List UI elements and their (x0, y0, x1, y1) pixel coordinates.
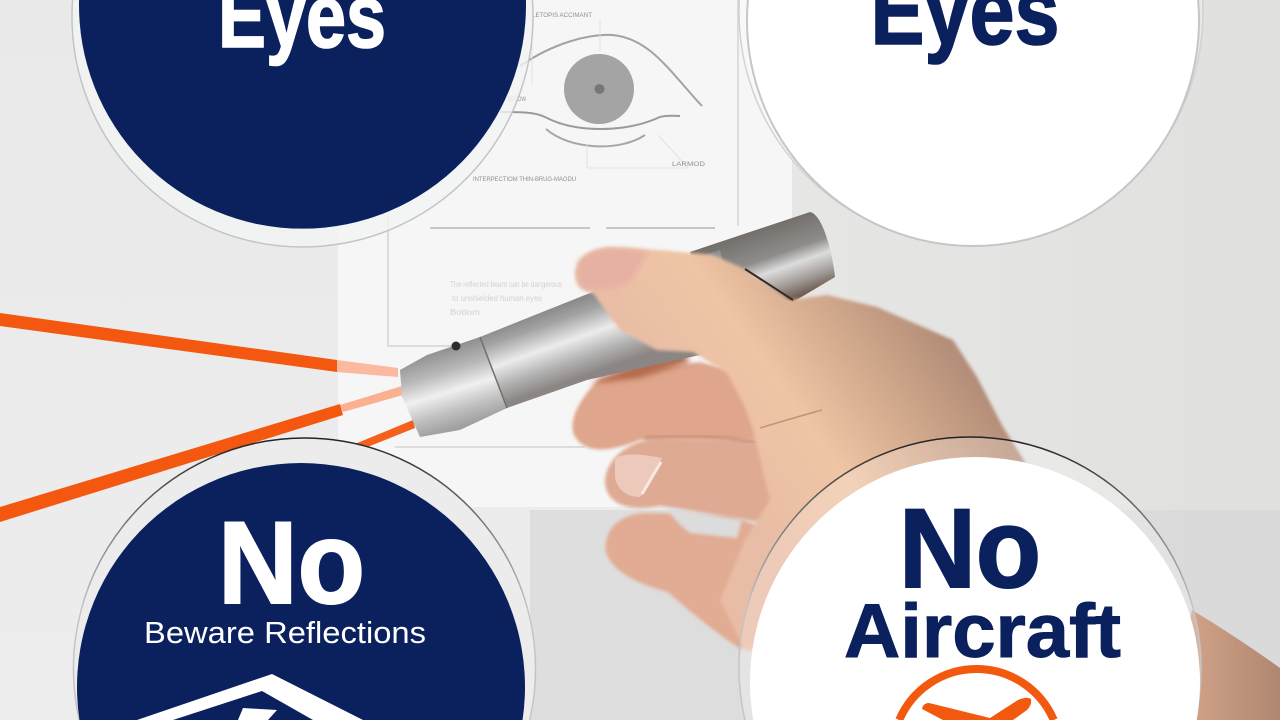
diagram labels: BECOW (508, 97, 526, 103)
callout: bottom right, no aircraft (739, 437, 1201, 720)
fingernail (615, 455, 662, 497)
gap between fingers (668, 508, 742, 538)
thumb and pointer crease (745, 269, 793, 300)
subheading: Aircraft (844, 589, 1121, 674)
laser beams (0, 313, 415, 522)
knuckle crease (760, 410, 822, 428)
finger shadow (645, 436, 755, 442)
paper notes: to unshielded human eyes (452, 294, 542, 303)
icon: aircraft prohibited (899, 669, 1054, 720)
forearm (1170, 610, 1280, 720)
thumb tip (578, 249, 648, 290)
callout: top right, protect eyes (739, 0, 1203, 246)
heading: No (218, 497, 365, 628)
eye diagram (500, 20, 702, 168)
hand: fingers behind pointer (572, 352, 790, 650)
paper sheet with eye diagram (338, 0, 792, 507)
upper beam (0, 313, 398, 377)
pointer body (480, 250, 745, 408)
diagram labels: LARMOD (672, 162, 706, 168)
pointer tip (400, 337, 507, 437)
hand: thumb, palm and forearm (575, 247, 1280, 720)
paper notes: The reflected beam can be dangerous (450, 280, 562, 289)
iris and pupil (564, 54, 634, 124)
laser pointer (400, 212, 835, 437)
paper notes (450, 280, 562, 317)
icon: reflection chevron (137, 674, 363, 720)
lower beam (350, 420, 415, 450)
heading: No (899, 486, 1041, 611)
paper notes: Bottom (450, 308, 480, 317)
pointer button (452, 342, 460, 350)
middle beam (0, 386, 403, 522)
thumb and palm (575, 247, 1025, 660)
subheading: Beware Reflections (144, 615, 426, 650)
diagram labels (473, 13, 706, 183)
pointer rear section (690, 212, 835, 302)
pointer seam (480, 337, 507, 408)
diagram labels: LETOPIS ACCIMANT (532, 13, 592, 19)
diagram labels: INTERPECTIOM THIN-BRUG-MAODU (473, 177, 576, 183)
callout: bottom left, beware reflections (73, 438, 536, 720)
callout: top left, protect eyes (72, 0, 533, 247)
